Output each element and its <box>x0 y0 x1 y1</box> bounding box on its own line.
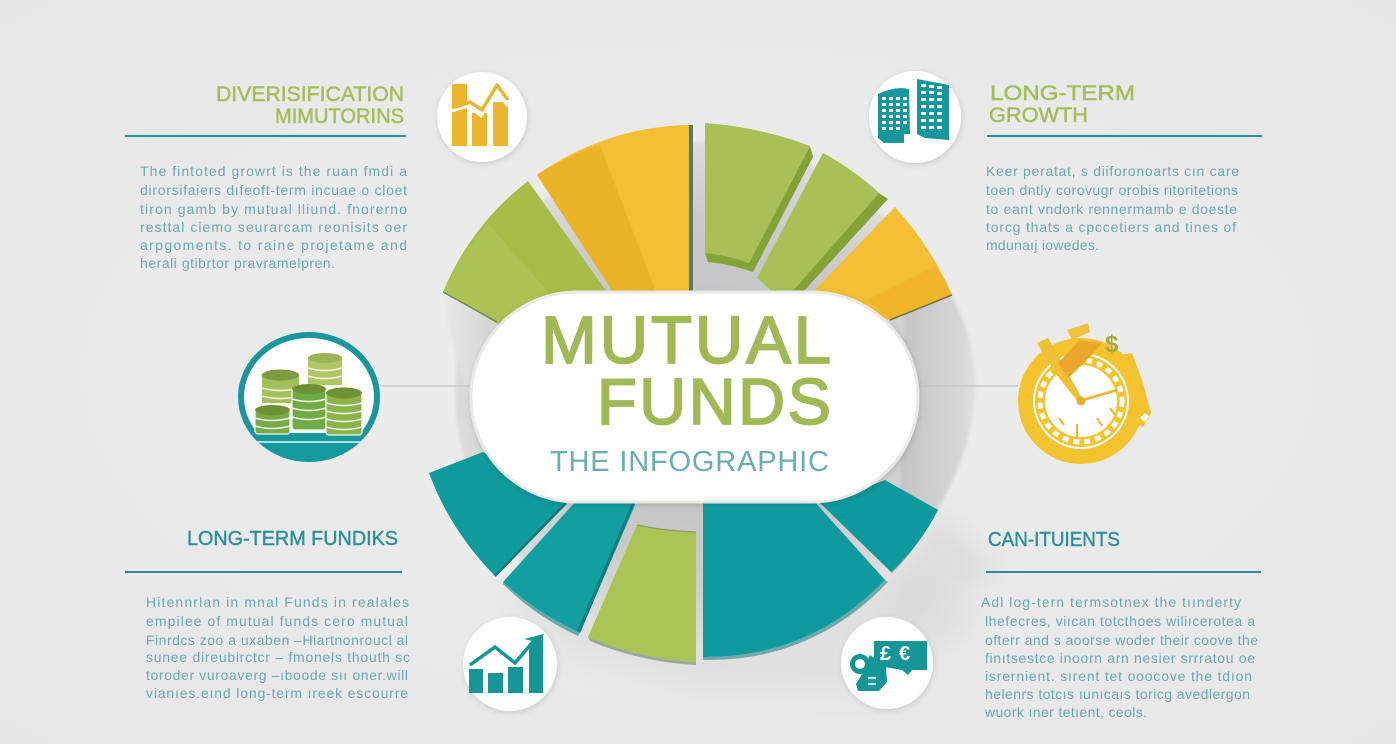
heading: MIMUTORINS <box>275 105 404 128</box>
text block: lhefecres, viıcan totcthoes wiliıcerotea a <box>985 613 1255 629</box>
text block: vianıes.eınd long-term ıreek escourre <box>146 685 408 701</box>
euro sign: € <box>899 643 910 665</box>
segment: green bottom <box>588 525 696 665</box>
panel: long-term funds <box>125 528 410 701</box>
text block: Adl log-tern termsotnex the tıınderty <box>981 594 1241 610</box>
text block: finıtsestce inoorn arn nesier srrratou oe <box>985 650 1255 666</box>
lower right diagonal shadow <box>890 510 1000 640</box>
text block: arpgoments. to raine projetame and <box>140 237 407 253</box>
text block: herali gtibrtor pravramelpren. <box>140 255 335 271</box>
text block: empilee of mutual funds cero mutual <box>146 613 408 629</box>
text block: Finrdcs zoo a uxaben –Hiartnonroucl al <box>146 632 408 648</box>
segment: teal right <box>820 480 938 573</box>
panel: constituents <box>981 529 1261 720</box>
text block: wuork ıner tetıent, ceols. <box>984 704 1147 720</box>
text block: toroder vuroaverg –ıboode sıı oner.will <box>146 667 408 683</box>
dollar sign: $ <box>1105 331 1119 358</box>
subtitle: THE INFOGRAPHIC <box>550 446 829 478</box>
heading: LONG-TERM <box>990 82 1135 105</box>
icon: growth chart <box>463 617 557 711</box>
heading: GROWTH <box>989 104 1088 127</box>
text block: tiron gamb by mutual lliund. fnorerno <box>140 201 407 217</box>
text block: isrernient. sırent tet ooocove the tdıon <box>985 668 1252 684</box>
text block: ofterr and s aoorse woder their coove the <box>985 632 1258 648</box>
heading: DIVERISIFICATION <box>216 83 404 106</box>
soft outer shadow <box>500 570 985 690</box>
icon: coin stacks <box>241 335 377 460</box>
icon: currency hand <box>841 617 933 709</box>
segment: green top right <box>757 153 888 292</box>
panel: long-term growth <box>986 82 1262 253</box>
text block <box>146 594 410 701</box>
donut chart <box>429 123 1000 690</box>
icon: clock <box>1018 323 1151 464</box>
heading rule <box>125 135 406 137</box>
text block: dirorsifaiers dıfeoft-term incuae o cloet <box>140 182 407 198</box>
segment: green upper left <box>443 181 607 325</box>
coin stack back <box>308 353 342 385</box>
text block <box>140 163 407 271</box>
segment: teal lower left <box>429 452 570 576</box>
text block: The fintoted growrt is the ruan fmdi a <box>140 163 407 179</box>
coin stack center <box>292 384 326 430</box>
text block: Keer peratat, s diiforonoarts cın care <box>986 163 1239 179</box>
icon: buildings <box>869 71 961 163</box>
segment: teal lower middle <box>503 500 635 636</box>
segment: green top <box>705 123 813 272</box>
left shadow <box>443 292 500 430</box>
pound sign: £ <box>880 643 891 665</box>
grey disc behind segments <box>455 142 955 642</box>
text block <box>986 163 1239 253</box>
text block: toen dntly corovugr orobis ritoritetions <box>986 182 1238 198</box>
text block: resttal ciemo seurarcam reonisits oer <box>140 219 407 235</box>
segment: teal bottom right <box>703 500 888 660</box>
connector line right <box>916 385 1018 387</box>
heading rule <box>987 135 1262 137</box>
text block: helenrs totcıs ıunıcaıs toricg avedlergon <box>985 686 1250 702</box>
heading: LONG-TERM FUNDIKS <box>187 528 398 550</box>
segment: yellow upper right <box>810 207 952 320</box>
right shadow crescent <box>900 290 975 512</box>
coin stack left back <box>262 370 299 403</box>
heading <box>216 83 404 128</box>
title second line: FUNDS <box>597 365 831 438</box>
heading <box>989 82 1135 127</box>
coin stack right <box>326 388 362 435</box>
text block: sunee direubirctcr – fmonels thouth sc <box>146 649 410 665</box>
panel: diversification <box>125 83 407 271</box>
text block: Hitennrlan in mnal Funds in realales <box>146 594 409 610</box>
heading rule <box>125 571 402 573</box>
text block: mdunaıj iowedes. <box>986 237 1099 253</box>
heading rule <box>986 571 1261 573</box>
icon: yellow bar chart <box>437 72 527 162</box>
text block <box>981 594 1258 720</box>
segment: yellow upper left <box>537 125 693 292</box>
coin stack front left <box>255 405 290 434</box>
connector line left <box>380 385 472 387</box>
title: MUTUAL <box>541 303 831 378</box>
center pill <box>471 292 918 502</box>
text block: torcg thats a cpccetiers and tines of <box>986 219 1236 235</box>
text block: to eant vndork rennermamb e doeste <box>986 201 1237 217</box>
heading: CAN-ITUIENTS <box>988 529 1120 551</box>
